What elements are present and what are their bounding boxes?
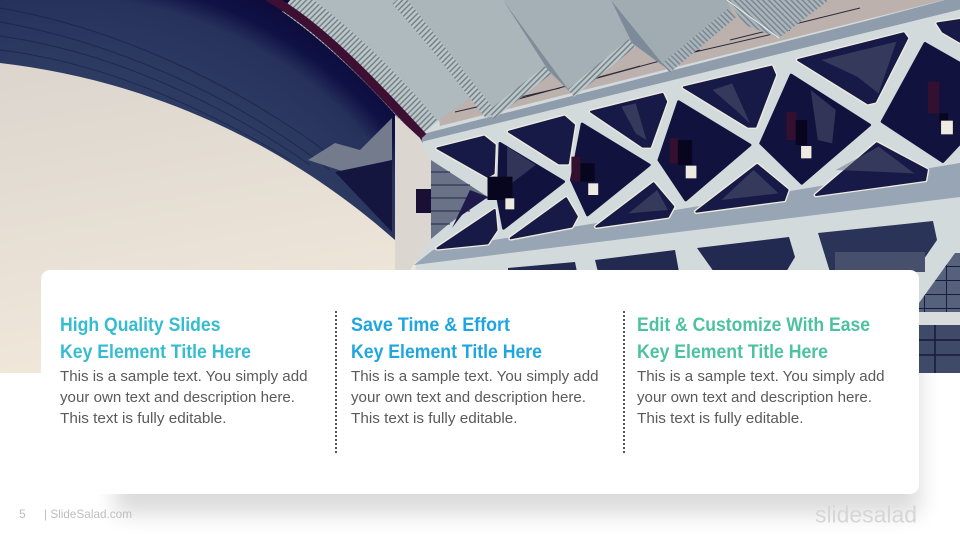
- column 3 body: This is a sample text. You simply add: [637, 369, 884, 385]
- left grey window: [431, 160, 488, 239]
- column 1 heading: Key Element Title Here: [60, 342, 251, 363]
- column 3 body: This text is fully editable.: [637, 411, 804, 427]
- reflections: [507, 42, 914, 213]
- cream support wall: [395, 115, 431, 270]
- column 1 heading: High Quality Slides: [60, 315, 220, 336]
- column 1: High Quality Slides: [60, 315, 308, 427]
- column 1 body: This is a sample text. You simply add: [60, 369, 308, 385]
- hanging black and white tags: [487, 82, 953, 209]
- column 3 heading: Key Element Title Here: [637, 342, 828, 363]
- card drop shadow: [108, 373, 928, 522]
- column 2: Save Time & Effort: [351, 315, 598, 427]
- column 2 heading: Save Time & Effort: [351, 315, 511, 336]
- column 2 heading: Key Element Title Here: [351, 342, 542, 363]
- slidesalad logo: slidesalad: [815, 502, 917, 528]
- lower window row: [508, 221, 960, 373]
- maroon roof edge: [268, 0, 423, 137]
- column 3 body: [637, 369, 884, 427]
- corrugated roof panels: [290, 0, 829, 130]
- white content card: [41, 270, 919, 494]
- column 2 body: your own text and description here.: [351, 390, 586, 406]
- column 1 body: [60, 369, 308, 427]
- window glow: [437, 20, 960, 248]
- column 2 body: [351, 369, 598, 427]
- column 1 body: This text is fully editable.: [60, 411, 226, 427]
- diamond windows: [498, 43, 960, 228]
- footer page number and site: | SlideSalad.com: [44, 507, 132, 521]
- silver beam and pink backing: [410, 0, 960, 373]
- upper and lower triangles: [437, 20, 960, 248]
- background photo: architecture: [0, 0, 960, 373]
- column 1 heading: [60, 315, 251, 363]
- icon: wall bracket: [416, 189, 440, 213]
- footer page number and site: 5: [19, 507, 26, 521]
- column 2 body: This is a sample text. You simply add: [351, 369, 598, 385]
- dark curved ceiling band: [0, 0, 440, 250]
- column 2 heading: [351, 315, 542, 363]
- column 3: Edit & Customize With Ease: [637, 315, 884, 427]
- cream curved wall: [0, 63, 430, 373]
- column 2 body: This text is fully editable.: [351, 411, 518, 427]
- column 3 heading: [637, 315, 870, 363]
- column 1 body: your own text and description here.: [60, 390, 295, 406]
- column 3 body: your own text and description here.: [637, 390, 872, 406]
- triangular glass windows: [437, 20, 960, 248]
- column 3 heading: Edit & Customize With Ease: [637, 315, 870, 336]
